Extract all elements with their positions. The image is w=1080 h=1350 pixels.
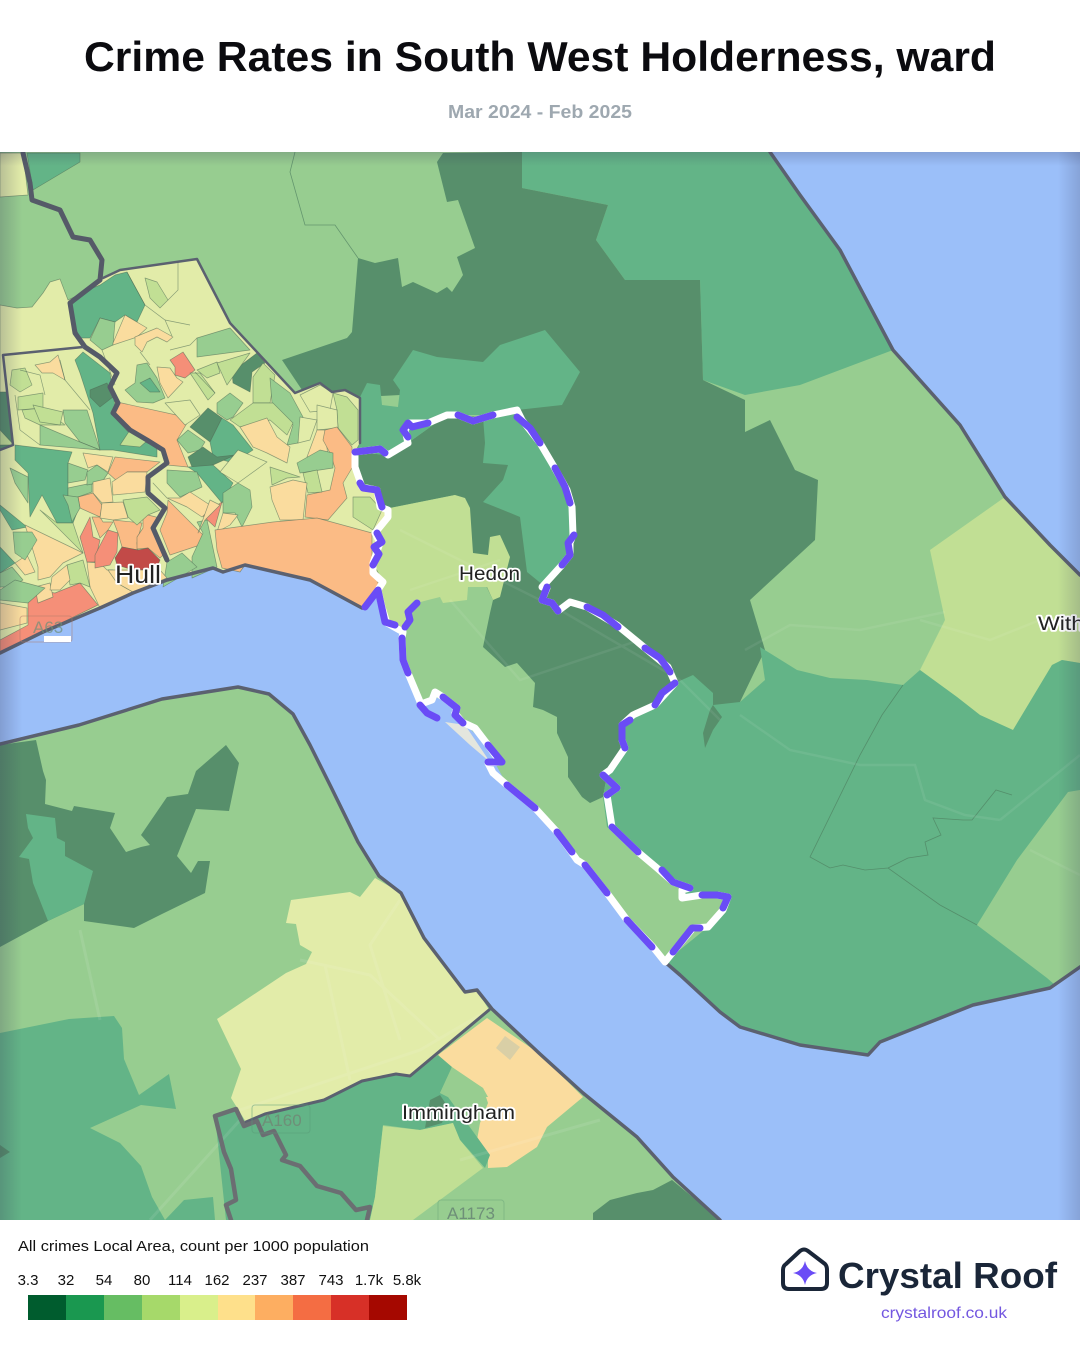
coastlines and boundary lines [0,152,1080,1220]
legend scale labels: 80 [134,1272,150,1289]
road labels: A160 [262,1111,302,1130]
legend scale labels: 3.3 [18,1272,38,1289]
icon: house with star [783,1250,827,1289]
title: Crime Rates in South West Holderness, ward [84,33,996,80]
place labels: Immingham [402,1103,515,1124]
legend scale labels: 162 [204,1272,230,1289]
panel: rural zones north of the Humber [282,152,1080,1055]
place labels: With [1038,614,1080,635]
legend scale labels: 387 [280,1272,306,1289]
place labels [115,561,1080,1124]
road labels [20,616,504,1226]
road labels: A63 [33,618,63,637]
legend title: All crimes Local Area, count per 1000 population [18,1238,369,1255]
panel: Hull output areas [0,153,388,653]
place labels: Hedon [459,564,520,585]
choropleth map [0,152,1080,1226]
website: crystalroof.co.uk [881,1305,1008,1322]
legend scale labels: 32 [58,1272,74,1289]
legend scale labels: 54 [96,1272,112,1289]
legend scale labels: 237 [242,1272,268,1289]
legend colour swatches [28,1295,407,1320]
west Hull cells [0,392,12,448]
logo wordmark: Crystal Roof [838,1255,1058,1296]
logo: Crystal Roof [783,1250,1058,1322]
subtitle: date range: Mar 2024 - Feb 2025 [448,102,632,122]
legend scale labels: 5.8k [393,1272,422,1289]
panel: zones south of the Humber [0,722,720,1220]
legend scale labels: 743 [318,1272,344,1289]
ward boundary: South West Holderness [355,410,728,962]
legend scale labels [18,1272,422,1289]
road labels: A1173 [447,1204,495,1223]
legend scale labels: 1.7k [355,1272,384,1289]
legend scale labels: 114 [168,1272,192,1289]
water: North Sea and Humber estuary [0,152,1080,1220]
legend [18,1238,422,1320]
place labels: Hull [115,561,161,589]
